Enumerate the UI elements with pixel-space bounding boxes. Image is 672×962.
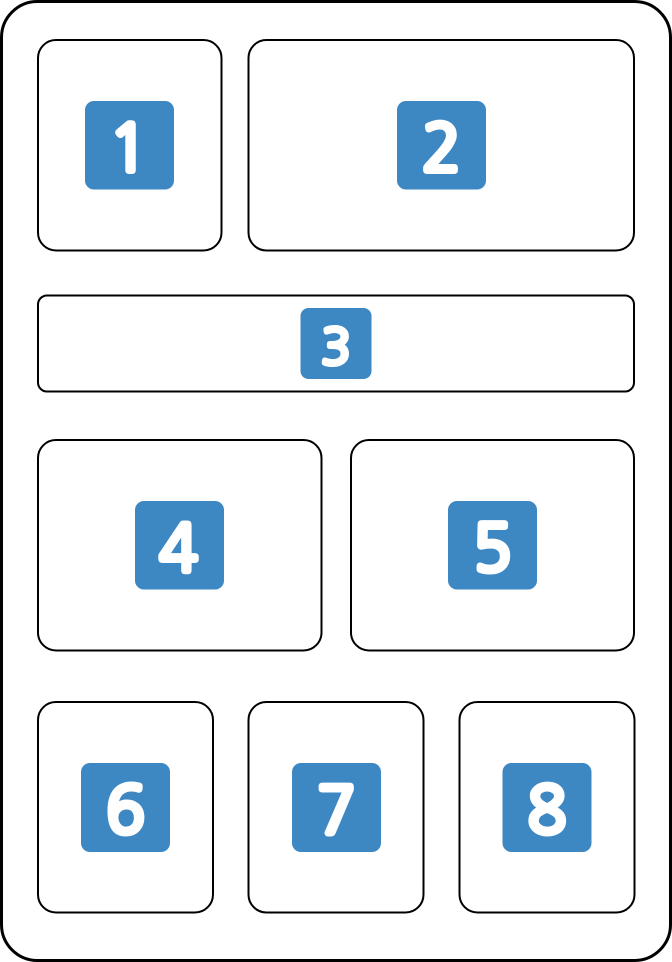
panel 5 — [351, 440, 634, 650]
badge 7: 7 — [317, 779, 356, 843]
badge 2: 2 — [422, 117, 461, 181]
badge 6: 6 — [106, 779, 145, 843]
panel 1 — [38, 40, 222, 250]
badge 6 — [81, 763, 170, 852]
badge 8: 8 — [528, 779, 566, 843]
panel 2 — [248, 40, 634, 250]
panel 6 — [38, 702, 213, 912]
badge 3 — [300, 308, 372, 379]
badge 8 — [502, 763, 592, 852]
panel 3 — [38, 296, 634, 392]
badge 3: 3 — [321, 323, 351, 372]
badge 1: 1 — [109, 117, 148, 181]
badge 4 — [135, 501, 224, 590]
badge 7 — [292, 763, 381, 852]
badge 1 — [85, 101, 174, 190]
badge 5 — [448, 501, 537, 590]
panel 4 — [38, 440, 322, 650]
badge 5: 5 — [473, 517, 512, 581]
panel 8 — [460, 702, 634, 912]
badge 4: 4 — [159, 517, 198, 581]
panel 7 — [248, 702, 424, 912]
badge 2 — [397, 101, 486, 190]
